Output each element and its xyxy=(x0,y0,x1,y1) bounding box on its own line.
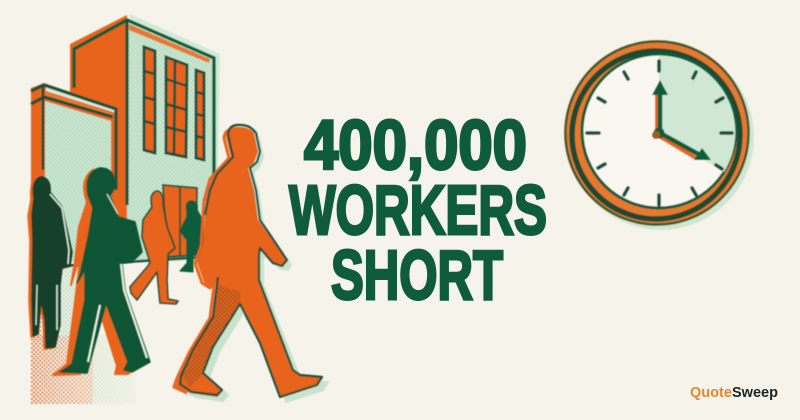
outline xyxy=(180,125,322,397)
clock hands xyxy=(652,80,711,160)
elapsed time wedge xyxy=(659,56,735,172)
halftone shading xyxy=(182,285,240,388)
headline xyxy=(289,106,547,314)
illustration: left walker in dark green xyxy=(28,177,72,349)
windows xyxy=(144,47,204,160)
large building xyxy=(70,14,220,262)
tick marks xyxy=(587,61,732,205)
clock shadow xyxy=(568,44,754,230)
small building xyxy=(31,83,119,262)
400,000: 400,000 xyxy=(304,106,527,184)
illustration: main walker xyxy=(174,125,328,402)
door xyxy=(163,185,197,257)
ground line xyxy=(62,257,205,266)
SHORT: SHORT xyxy=(331,236,503,314)
clock rim xyxy=(564,40,750,226)
shadow xyxy=(183,133,328,402)
illustration: buildings xyxy=(31,14,220,404)
clock face xyxy=(583,55,735,207)
WORKERS: WORKERS xyxy=(289,171,547,249)
body xyxy=(177,128,322,397)
ground halftone xyxy=(31,100,136,404)
illustration: small walker in orange xyxy=(130,191,178,304)
logo: QuoteSweep xyxy=(690,385,778,401)
illustration: walker with backpack xyxy=(53,168,150,375)
orange misregistration xyxy=(174,129,237,393)
illustration: small walker in green xyxy=(180,201,205,272)
icon: clock xyxy=(564,40,754,230)
